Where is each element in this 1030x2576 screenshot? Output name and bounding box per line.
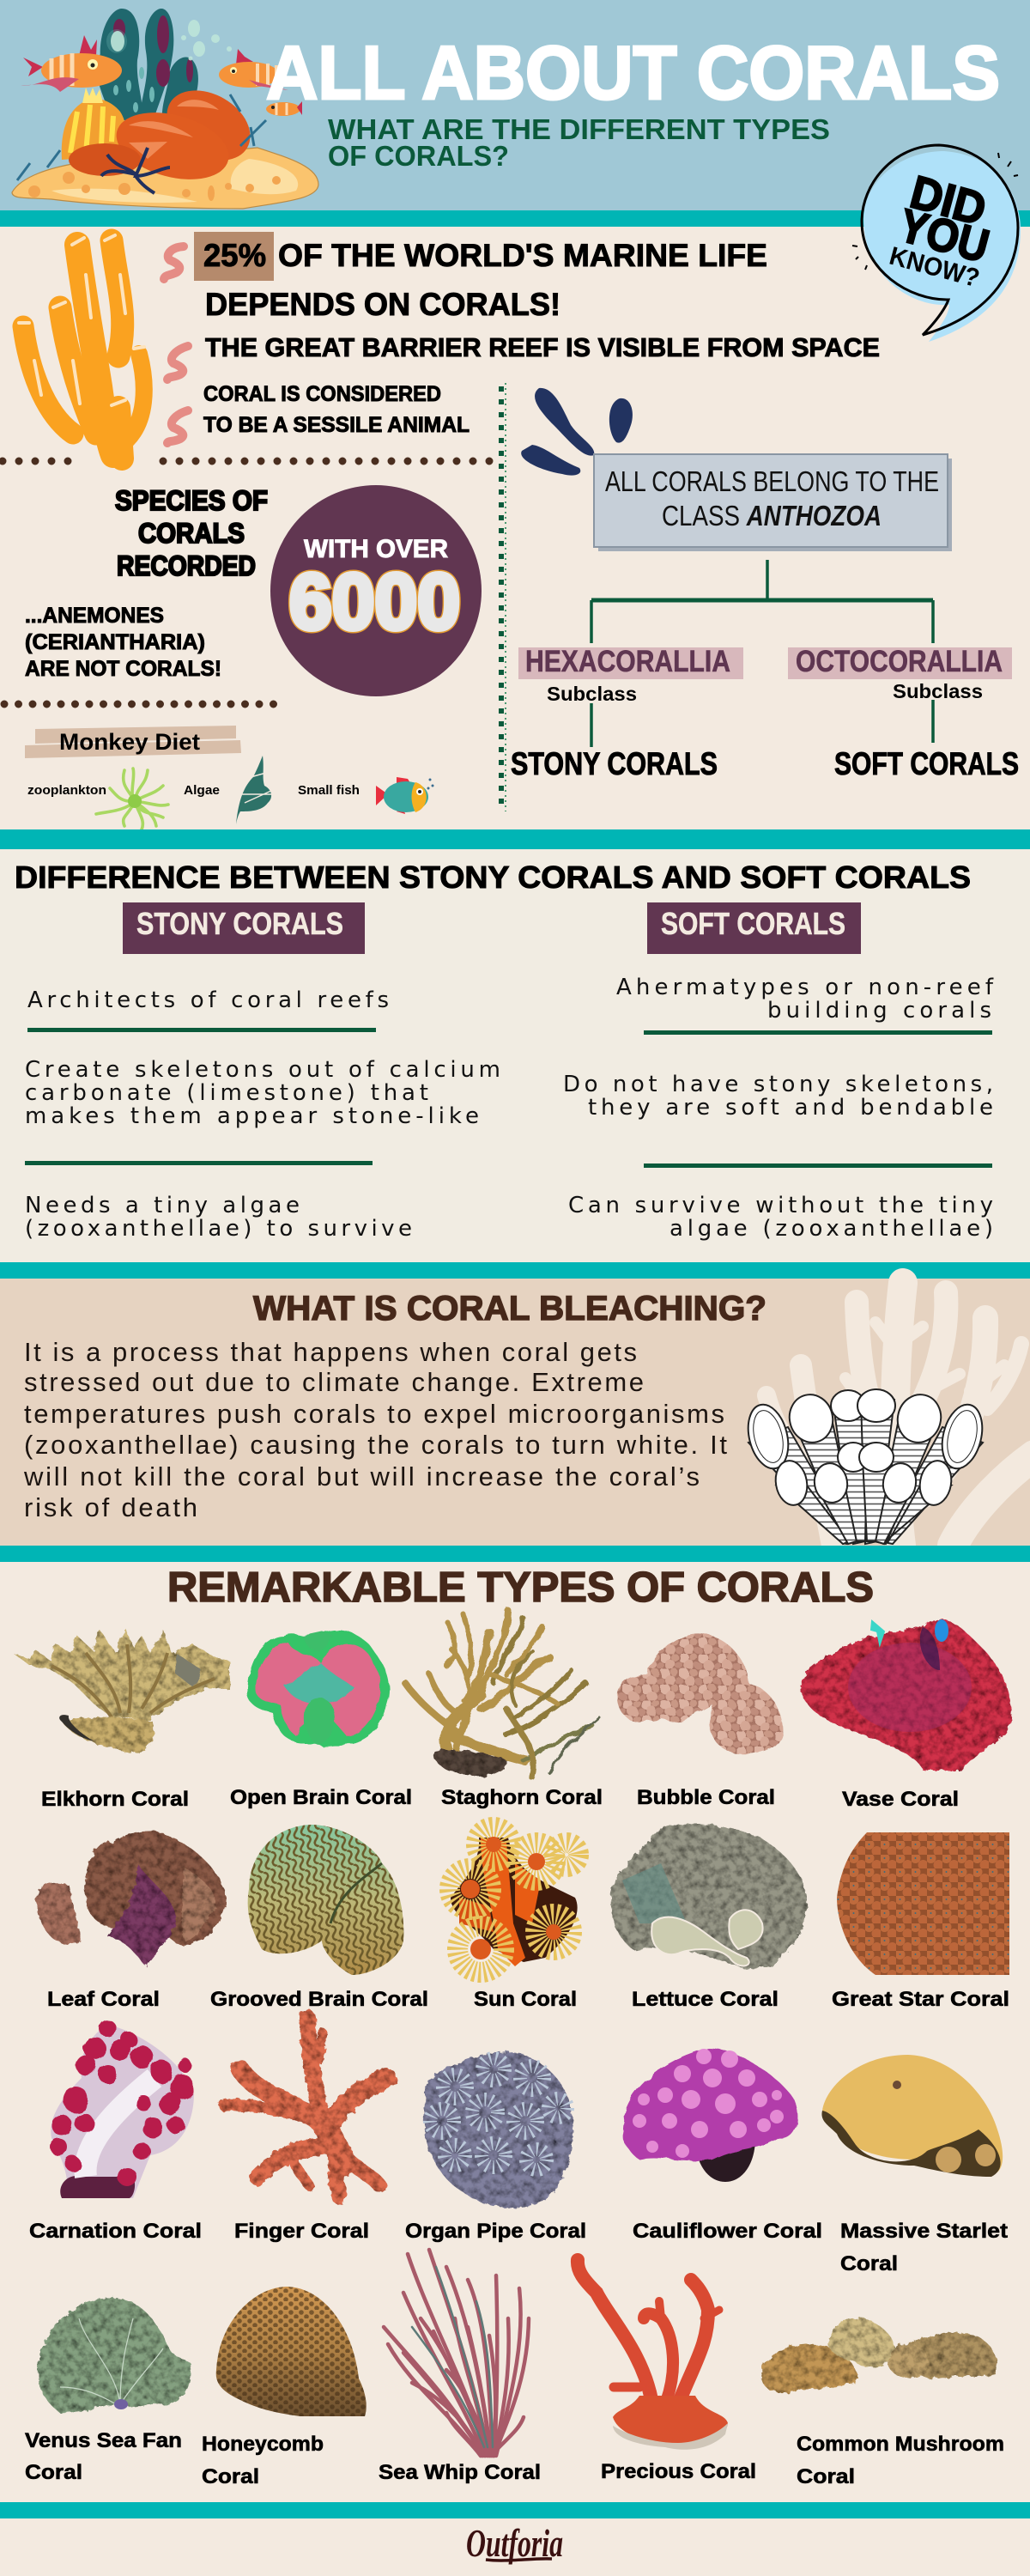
callout: did you know speech bubble: DID [905, 167, 991, 235]
fact: 25% of marine life: OF THE WORLD'S MARINE LIFE [278, 238, 767, 273]
coral: common mushroom [762, 2318, 997, 2392]
air bubbles [181, 20, 232, 60]
coral: venus sea fan [38, 2297, 191, 2413]
label: Sea Whip Coral [379, 2461, 541, 2484]
body text: (zooxanthellae) causing the corals to turn white. It [24, 1430, 727, 1460]
soft corals facts: building corals [767, 998, 991, 1024]
soft corals facts: Do not have stony skeletons, [563, 1072, 993, 1097]
diet item: small fish [298, 777, 434, 814]
subtitle [328, 113, 830, 172]
vertical dotted divider [501, 383, 506, 811]
coral: vase [801, 1619, 1012, 1771]
leaf node: stony corals: STONY CORALS [511, 746, 718, 781]
label [25, 2429, 182, 2484]
icon: white tube coral cluster [742, 1389, 989, 1544]
subclass: octocorallia: OCTOCORALLIA [796, 645, 1003, 678]
title: ALL ABOUT CORALS [266, 30, 1000, 115]
sand island [12, 148, 318, 209]
dark weed [101, 148, 170, 193]
logo: outforia [466, 2521, 563, 2565]
label: Vase Coral [842, 1788, 959, 1811]
panel: remarkable types of corals [13, 1564, 1012, 2488]
coral: leaf [36, 1831, 226, 1966]
pale coral silhouette [766, 1283, 1030, 1546]
fact: 25% of marine life: 25% [203, 238, 266, 273]
subtitle: WHAT ARE THE DIFFERENT TYPES [328, 113, 830, 145]
divider bar top [0, 210, 1030, 227]
panel: coral bleaching [0, 1279, 1030, 1546]
icon: blue splash marks [521, 388, 633, 476]
subclass: hexacorallia: HEXACORALLIA [525, 645, 730, 678]
coral: grooved brain [248, 1825, 403, 1975]
coral: finger [225, 2018, 386, 2196]
body text: It is a process that happens when coral gets [24, 1337, 637, 1367]
label: Precious Coral [601, 2460, 756, 2483]
teal coral [95, 9, 198, 129]
subclass: hexacorallia [518, 645, 743, 705]
body text: risk of death [24, 1492, 197, 1522]
yellow coral [62, 99, 126, 160]
heading: DIFFERENCE BETWEEN STONY CORALS AND SOFT CORALS [15, 860, 971, 895]
stony corals facts: (zooxanthellae) to survive [25, 1216, 412, 1242]
callout: did you know speech bubble: KNOW? [887, 242, 983, 293]
stat circle: with over 6000 [270, 485, 482, 696]
label: soft corals [647, 902, 861, 954]
label: Coral [840, 2252, 898, 2275]
diet item: zooplankton: zooplankton [27, 783, 106, 798]
label: Massive Starlet [840, 2220, 1008, 2243]
stony corals facts: Create skeletons out of calcium [25, 1057, 500, 1083]
classification tree connectors [591, 560, 933, 747]
label: Common Mushroom [797, 2433, 1004, 2456]
soft corals facts: Can survive without the tiny [568, 1193, 993, 1218]
label: Elkhorn Coral [41, 1788, 189, 1811]
stony corals facts: Architects of coral reefs [27, 987, 389, 1013]
coral: precious [578, 2260, 728, 2450]
subclass: hexacorallia: Subclass [547, 683, 637, 705]
coral: sea whip [384, 2250, 529, 2456]
coral: cauliflower [622, 2048, 797, 2182]
coral: organ pipe [423, 2052, 573, 2208]
monkey diet heading: Monkey Diet [59, 729, 200, 755]
coral: massive starlet [821, 2055, 1003, 2177]
label: Great Star Coral [832, 1988, 1009, 2011]
label: Coral [797, 2465, 855, 2488]
body text: stressed out due to climate change. Extreme [24, 1367, 644, 1397]
panel: header [0, 0, 1030, 210]
label: Sun Coral [474, 1988, 577, 2011]
class box: anthozoa: ALL CORALS BELONG TO THE [605, 465, 939, 497]
logo: outforia: Outforia [466, 2521, 563, 2565]
stat circle: with over 6000: 6000 [289, 558, 460, 646]
label [797, 2433, 1004, 2488]
label: Bubble Coral [637, 1786, 775, 1809]
label: soft corals: SOFT CORALS [661, 906, 845, 941]
fish 1 [21, 35, 122, 92]
divider bar [0, 1546, 1030, 1562]
stat circle: with over 6000: 6000 [289, 558, 460, 646]
fact: great barrier reef: THE GREAT BARRIER REEF IS VISIBLE FROM SPACE [205, 332, 880, 362]
fish 3 [266, 101, 302, 116]
diet item: small fish: Small fish [298, 783, 360, 798]
callout: did you know speech bubble [852, 145, 1021, 342]
species recorded text: CORALS [138, 518, 245, 549]
label: Cauliflower Coral [633, 2220, 822, 2243]
label: Organ Pipe Coral [405, 2220, 586, 2243]
label: Venus Sea Fan [25, 2429, 182, 2452]
stony corals facts: makes them appear stone-like [25, 1103, 479, 1129]
subtitle: OF CORALS? [328, 140, 509, 172]
coral: bubble [617, 1633, 783, 1754]
highlight box: 25% [194, 232, 274, 281]
label: Staghorn Coral [441, 1786, 603, 1809]
label: stony corals: STONY CORALS [136, 906, 343, 941]
class box: anthozoa [594, 454, 952, 551]
diet item: algae [184, 756, 275, 824]
stat circle: with over 6000: WITH OVER [304, 535, 448, 563]
label [840, 2220, 1008, 2275]
fact: sessile animal [203, 382, 470, 437]
dotted separator upper [3, 457, 491, 465]
anemones note: ARE NOT CORALS! [25, 657, 221, 681]
subclass: octocorallia [788, 645, 1012, 702]
body text [23, 1337, 727, 1522]
soft corals facts: algae (zooxanthellae) [670, 1216, 993, 1242]
body text: temperatures push corals to expel microorganisms [24, 1399, 724, 1429]
fact: sessile animal: TO BE A SESSILE ANIMAL [203, 413, 470, 437]
label: Coral [202, 2465, 259, 2488]
label: Coral [25, 2461, 82, 2484]
fact: sessile animal: CORAL IS CONSIDERED [203, 382, 441, 406]
label: Carnation Coral [29, 2220, 202, 2243]
label: Open Brain Coral [230, 1786, 412, 1809]
heading: WHAT IS CORAL BLEACHING? [253, 1290, 766, 1327]
anemones note: (CERIANTHARIA) [25, 630, 205, 654]
label [202, 2433, 324, 2488]
anemones note [25, 604, 221, 681]
orange rocks [154, 76, 263, 174]
anemones note: ...ANEMONES [25, 604, 164, 628]
species recorded text [115, 485, 268, 581]
fact: 25% of marine life [203, 238, 767, 322]
coral: open brain [247, 1630, 389, 1748]
coral: elkhorn [13, 1627, 230, 1753]
coral: sun [450, 1827, 579, 1972]
panel: difference between stony and soft corals [0, 849, 1030, 1262]
coral: honeycomb [216, 2287, 367, 2416]
soft corals facts [563, 975, 994, 1242]
divider bar [0, 1262, 1030, 1279]
label: Leaf Coral [47, 1988, 160, 2011]
diet item: zooplankton [27, 769, 168, 829]
monkey diet heading [25, 726, 241, 758]
label: stony corals [123, 902, 365, 954]
icon: pink arrow squiggles [164, 246, 188, 443]
coral: lettuce [610, 1824, 807, 1969]
label: Honeycomb [202, 2433, 324, 2456]
divider bar [0, 829, 1030, 849]
callout: did you know speech bubble: YOU [894, 199, 994, 273]
class box: anthozoa: CLASS ANTHOZOA [662, 500, 882, 532]
dotted separator lower [4, 701, 282, 708]
stony corals facts [25, 987, 500, 1242]
stony corals facts: Needs a tiny algae [25, 1193, 300, 1218]
label: Finger Coral [234, 2220, 369, 2243]
panel: did you know facts [3, 145, 1021, 829]
illustration: reef island with fish [12, 9, 318, 209]
diet item: algae: Algae [184, 783, 220, 798]
icon: orange tube coral [19, 235, 144, 459]
subclass: octocorallia: Subclass [893, 680, 983, 702]
species recorded text: RECORDED [117, 550, 256, 581]
fact: 25% of marine life: DEPENDS ON CORALS! [205, 287, 560, 322]
soft corals facts: they are soft and bendable [588, 1095, 993, 1121]
divider bar bottom [0, 2502, 1030, 2518]
species recorded text: SPECIES OF [115, 485, 268, 516]
coral: staghorn [405, 1611, 599, 1777]
heading: REMARKABLE TYPES OF CORALS [167, 1564, 874, 1611]
coral: carnation [50, 2020, 194, 2198]
coral: great star [837, 1832, 1009, 1975]
stony corals facts: carbonate (limestone) that [25, 1080, 428, 1106]
label: Lettuce Coral [632, 1988, 779, 2011]
label: Grooved Brain Coral [210, 1988, 428, 2011]
body text: will not kill the coral but will increase the coral’s [23, 1461, 700, 1492]
soft corals facts: Ahermatypes or non-reef [616, 975, 994, 1000]
fish 2 [219, 49, 288, 90]
